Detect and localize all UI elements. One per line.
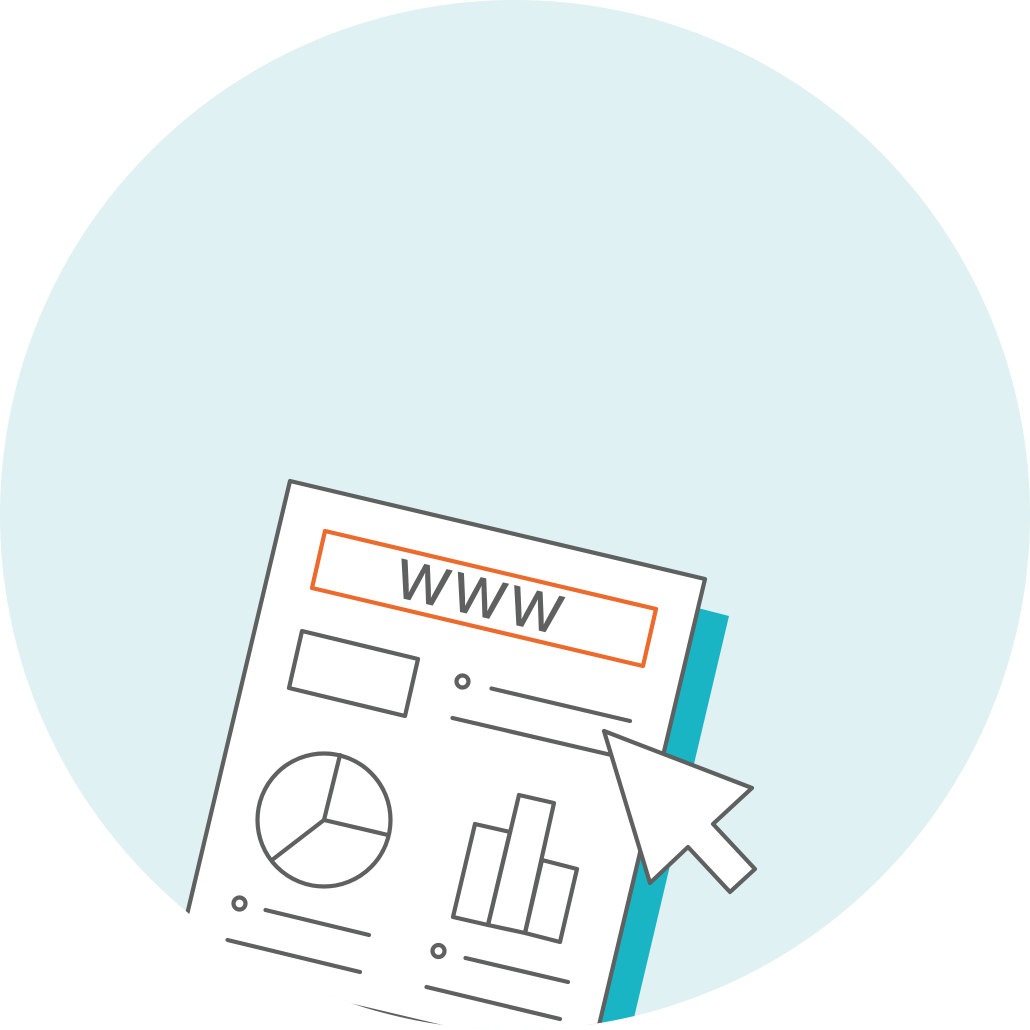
pie chart	[258, 754, 390, 886]
icon: mouse cursor arrow	[604, 731, 755, 892]
address bar	[312, 531, 656, 666]
bullet text bottom centre	[426, 945, 568, 1019]
page contents	[228, 531, 656, 1019]
bullet text top right	[452, 676, 630, 757]
address text: WWW	[390, 547, 574, 647]
document group clipped to the circle	[175, 481, 729, 1030]
teal page shadow	[580, 606, 729, 1030]
bullet text bottom left	[228, 898, 369, 972]
image placeholder box	[289, 631, 418, 716]
address bar outline	[312, 531, 656, 666]
bar chart	[453, 795, 577, 942]
white document page	[175, 481, 705, 1030]
